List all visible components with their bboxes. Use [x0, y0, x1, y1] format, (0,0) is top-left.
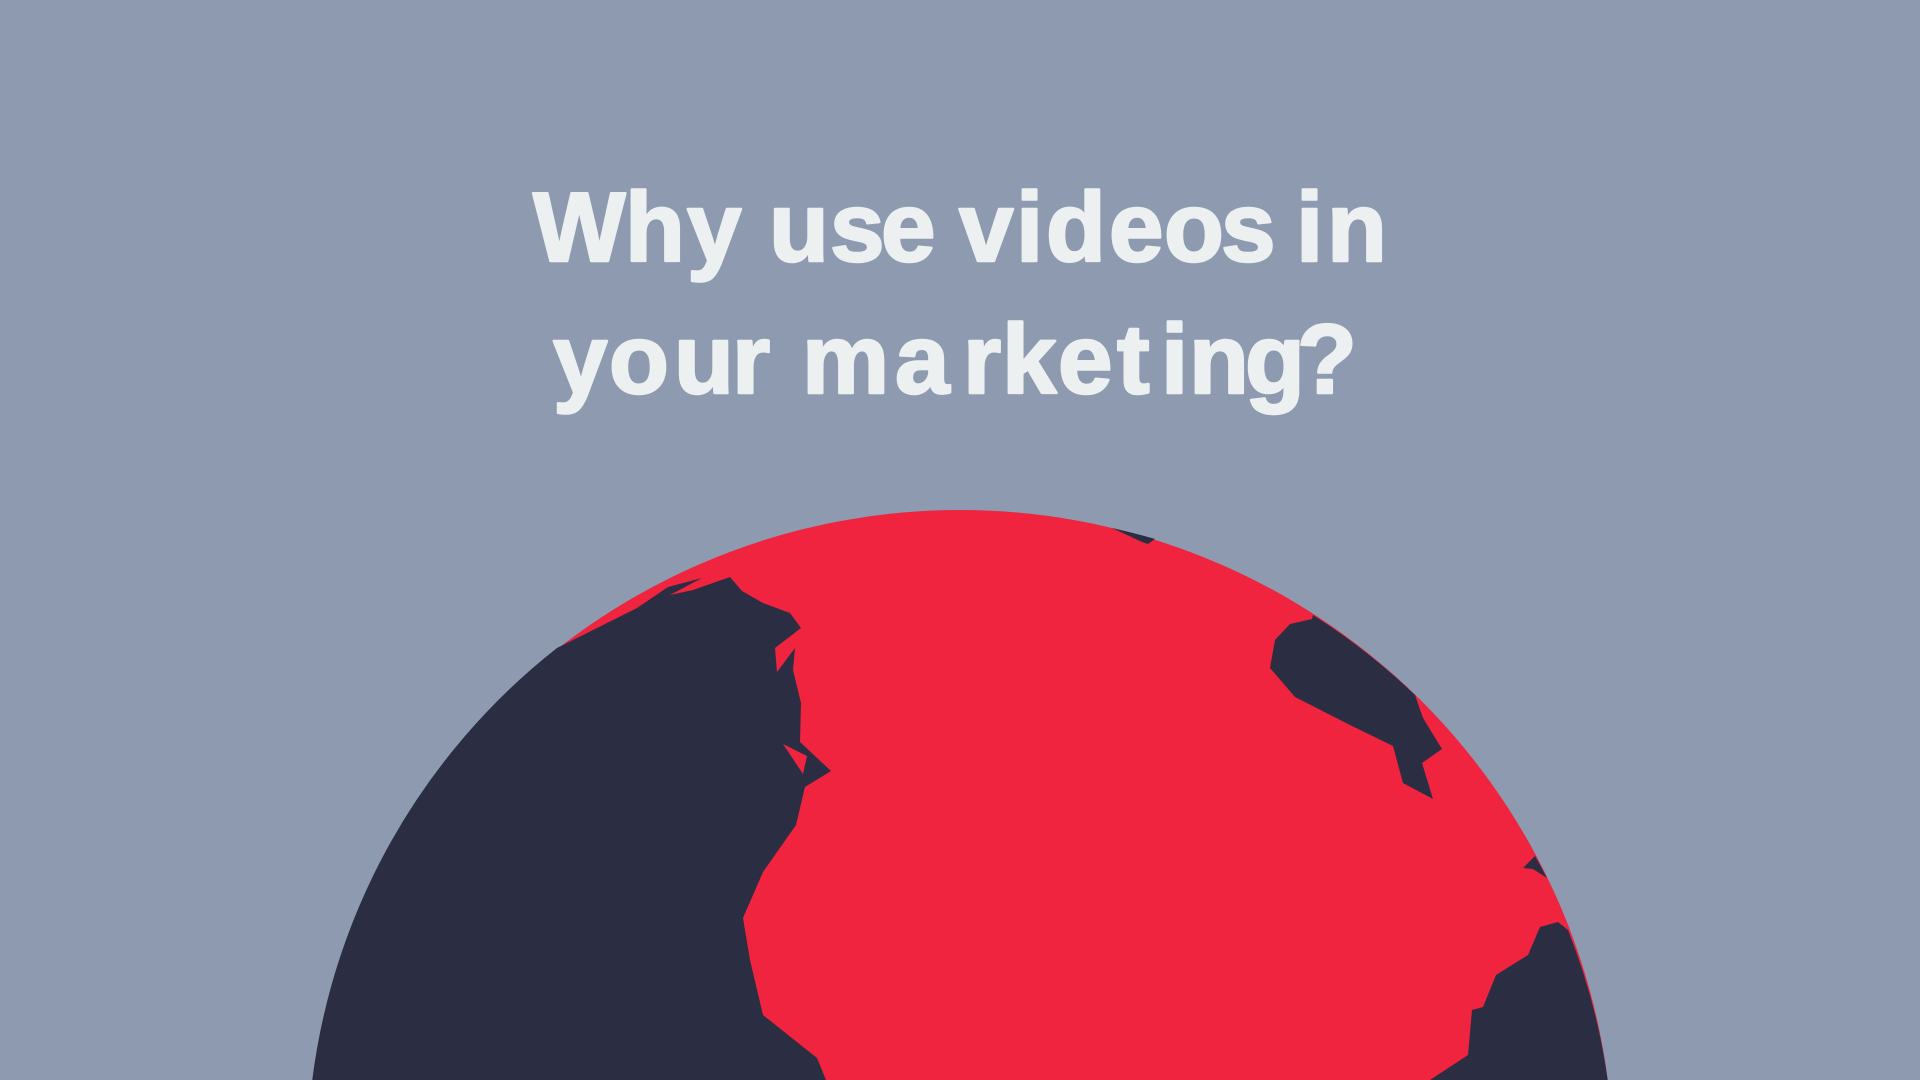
continent: top sliver [1112, 528, 1155, 544]
title line 1: Why use videos in [533, 172, 1387, 282]
continent: upper right landmass [1270, 615, 1442, 799]
continent: small right island [1523, 856, 1547, 878]
title line 2: your marketing? [553, 304, 1357, 414]
continent: lower right landmass [1430, 922, 1608, 1080]
continent: left landmass [312, 577, 831, 1080]
globe ocean [312, 510, 1608, 1080]
title [533, 172, 1387, 414]
globe [312, 510, 1608, 1080]
